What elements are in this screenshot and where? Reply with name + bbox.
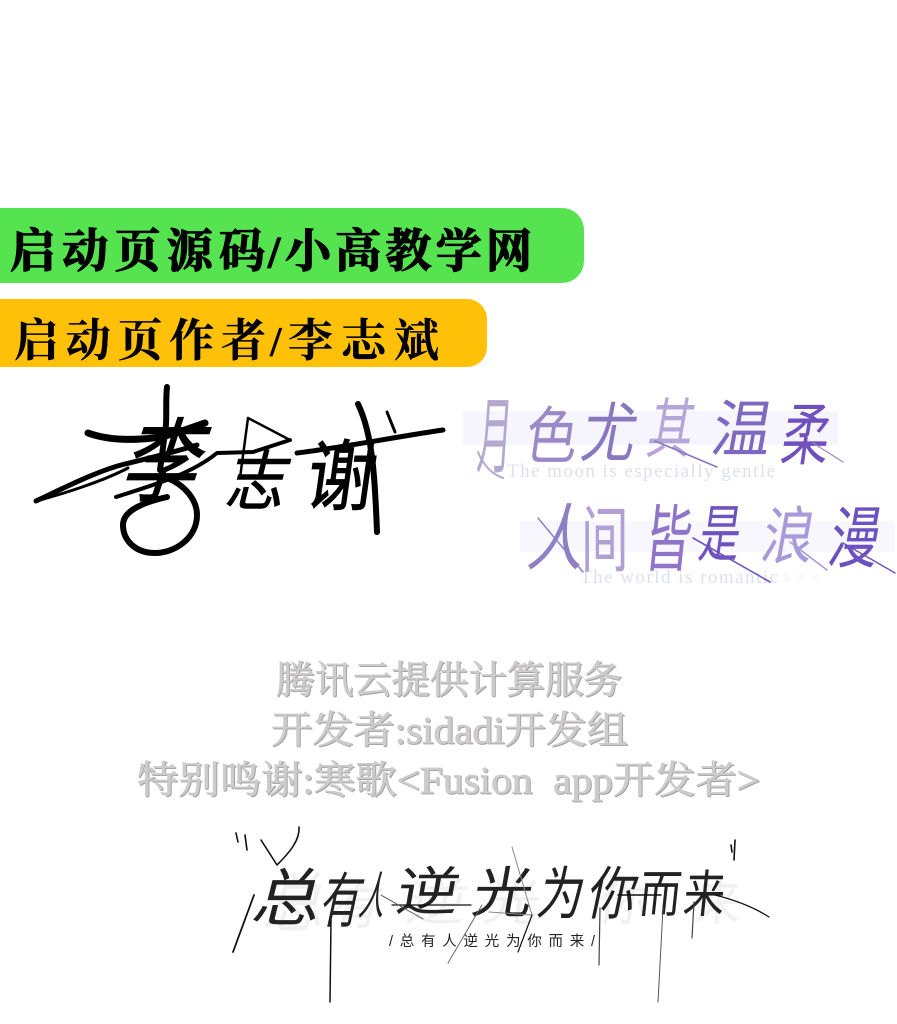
heading: source credit: 启动页源码	[10, 226, 265, 277]
slogan: pale ghost layer: 逆	[402, 875, 472, 931]
poem: english subtitles: 黎庆月	[782, 572, 820, 583]
signature: 志	[220, 446, 297, 518]
poem line 2 handwriting: 间	[581, 501, 628, 581]
poem: english subtitles: The world is romantic	[580, 567, 778, 588]
poem line 2 handwriting: 皆	[640, 500, 696, 581]
slogan: pale ghost layer: 来	[693, 876, 744, 932]
poem: pale background bands	[463, 411, 895, 552]
credits text block	[137, 660, 760, 802]
credits text block: 开发者:sidadi开发组	[271, 710, 628, 752]
heading: source credit: /	[267, 228, 281, 277]
slogan: handwriting: 你	[582, 863, 644, 927]
slogan: handwriting: 为	[532, 863, 592, 927]
slogan: handwriting: 光	[468, 864, 539, 924]
slogan: pale ghost layer: 有	[325, 879, 389, 935]
credits text block: 特别鸣谢:寒歌<Fusion app开发者>	[137, 760, 760, 802]
poem: english subtitles	[507, 461, 820, 588]
poem line 1 handwriting: 温	[707, 395, 778, 464]
heading: source credit	[10, 226, 532, 277]
slogan: handwriting: 总	[247, 863, 332, 933]
slogan: handwriting: 来	[681, 866, 728, 923]
credits text block: 腾讯云提供计算服务	[276, 660, 622, 702]
poem line 1 handwriting	[475, 390, 843, 484]
slogan: handwriting: 有	[315, 868, 370, 935]
heading: author credit: 李志斌	[288, 316, 441, 366]
heading: author credit: /	[269, 320, 283, 366]
signature: 李	[111, 413, 220, 514]
poem line 2 handwriting: 是	[695, 501, 746, 570]
poem line 1 handwriting: 色	[521, 403, 583, 472]
poem line 1 handwriting: 其	[643, 393, 700, 466]
poem line 2 handwriting: 人	[522, 499, 598, 580]
heading: author credit	[14, 316, 441, 366]
signature	[36, 387, 443, 553]
panel: amber author banner	[0, 299, 487, 367]
poem: english subtitles: The moon is especially gentle	[507, 461, 775, 482]
heading: author credit: 启动页作者	[14, 316, 266, 366]
poem line 1 handwriting: 尤	[577, 398, 643, 470]
poem line 1 handwriting: 月	[475, 390, 515, 484]
slogan: handwriting: 而	[637, 866, 684, 923]
slogan caption: /总有人逆光为你而来/	[389, 933, 596, 950]
poem line 1 handwriting: 柔	[777, 399, 835, 474]
slogan: pale ghost layer: 总	[258, 868, 337, 940]
slogan: pale ghost layer: 你	[594, 874, 654, 931]
poem line 2 handwriting: 漫	[823, 501, 887, 577]
slogan: pale ghost layer	[258, 868, 744, 940]
slogan: pale ghost layer: 光	[480, 876, 545, 931]
slogan: handwriting: 人	[355, 868, 395, 925]
signature: 谢	[302, 434, 382, 521]
heading: source credit: 小高教学网	[285, 226, 532, 277]
slogan: handwriting	[233, 827, 769, 1002]
poem line 2 handwriting	[522, 499, 895, 582]
poem line 2 handwriting: 浪	[757, 503, 821, 572]
panel: green source banner	[0, 208, 584, 283]
slogan: handwriting: 逆	[392, 863, 465, 922]
